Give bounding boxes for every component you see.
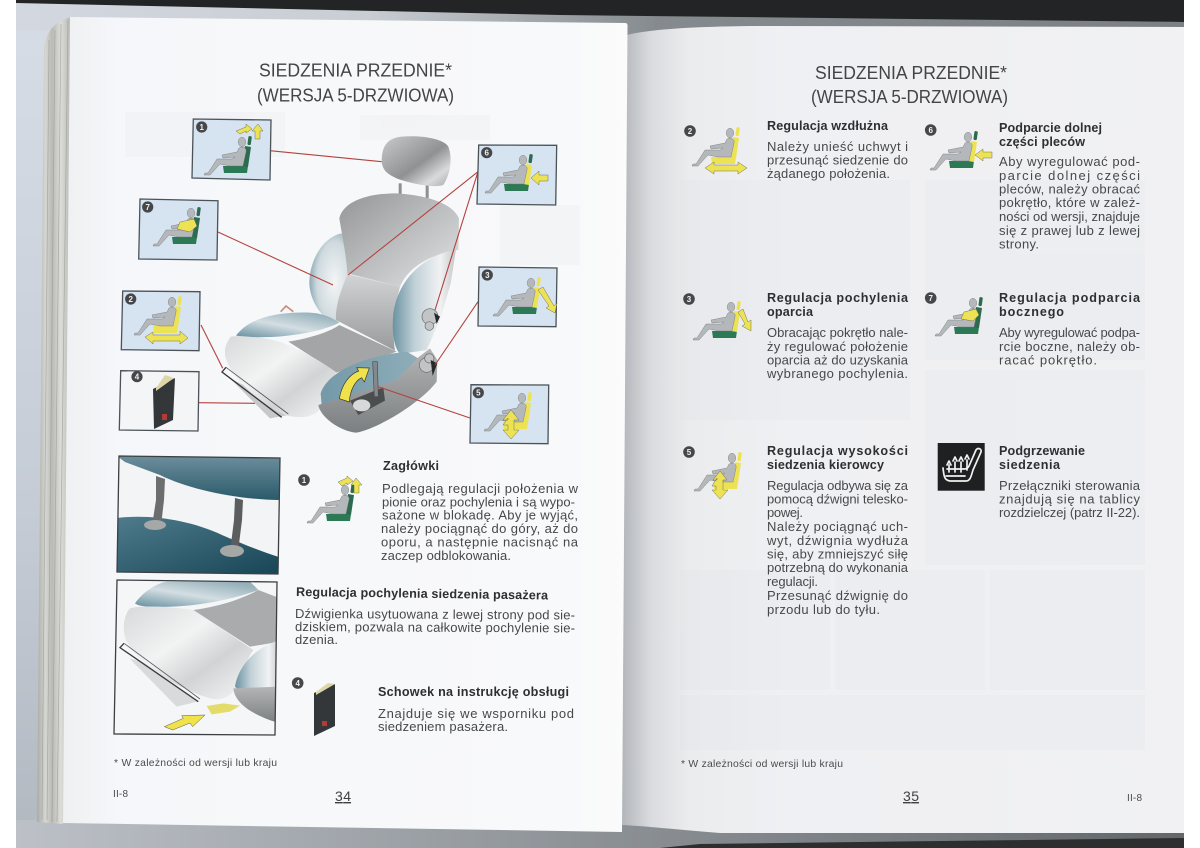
section: Podparcie dolnej części pleców: Aby wyregulować pod-	[999, 154, 1140, 169]
callout box 6: lumbar support	[477, 145, 557, 205]
title: left page	[257, 60, 454, 106]
show-through from reverse side	[680, 180, 1145, 750]
section: Zagłówki: Podlegają regulacji położenia w	[382, 481, 579, 496]
section: Regulacja pochylenia siedzenia pasażera: Regulacja pochylenia siedzenia pasażera	[296, 585, 549, 603]
section: Regulacja wysokości siedzenia kierowcy: Regulacja wysokości	[767, 444, 908, 458]
callout box 4: manual stowage: 4	[135, 373, 140, 382]
section: Regulacja podparcia bocznego: bocznego	[999, 305, 1064, 319]
section: Zagłówki: sażone w blokadę. Aby je wyjąć,	[382, 508, 578, 522]
knobs	[419, 309, 438, 372]
section: Schowek na instrukcję obsługi: Schowek na instrukcję obsługi	[378, 685, 569, 699]
section: Regulacja pochylenia oparcia: oparcia aż do uzyskania	[767, 352, 909, 368]
section: Regulacja pochylenia oparcia: oparcia	[767, 305, 814, 319]
icon: longitudinal	[684, 125, 747, 174]
callout box 7: side support	[139, 199, 218, 260]
section: Regulacja podparcia bocznego: Aby wyregulować podpa-	[999, 325, 1140, 340]
icon: height: 5	[687, 448, 692, 457]
section: Podparcie dolnej części pleców: parcie dolnej części	[999, 168, 1140, 183]
yellow arrow	[339, 368, 369, 402]
title: left page: (WERSJA 5-DRZWIOWA)	[257, 86, 454, 106]
section: Zagłówki: Zagłówki	[383, 459, 439, 473]
connector lines	[199, 151, 478, 418]
footnote: right page: * W zależności od wersji lub kraju	[681, 759, 843, 770]
section: Regulacja podparcia bocznego: racać pokrętło.	[999, 352, 1097, 368]
callout box 5: height adjustment: 5	[476, 389, 481, 398]
seat wing	[236, 313, 339, 337]
section: Regulacja pochylenia siedzenia pasażera: Dźwigienka usytuowana z lewej strony pod sie-	[295, 606, 575, 622]
section: Regulacja wzdłużna: przesunąć siedzenie do	[767, 152, 908, 168]
section: Regulacja wysokości siedzenia kierowcy: Należy pociągnąć uch-	[767, 519, 908, 534]
section: Podparcie dolnej części pleców	[925, 121, 1140, 252]
side panel	[321, 352, 418, 405]
title: right page	[811, 63, 1008, 107]
section: Podparcie dolnej części pleców: strony.	[999, 236, 1039, 252]
section: Regulacja wysokości siedzenia kierowcy	[683, 444, 909, 617]
section: Regulacja pochylenia oparcia	[683, 291, 909, 381]
section: Podgrzewanie siedzenia: Przełączniki sterowania	[999, 478, 1141, 493]
photo: passenger seat tilt lever	[114, 580, 280, 735]
page number 34: 34	[335, 788, 351, 804]
photo: headrest posts	[115, 456, 282, 576]
section: Podgrzewanie siedzenia: rozdzielczej (patrz II-22).	[999, 505, 1140, 520]
seat centre	[288, 325, 397, 373]
icon: manual: 4	[295, 679, 300, 688]
section: Regulacja wysokości siedzenia kierowcy: wyt, dźwignia wydłuża	[766, 533, 909, 548]
lever	[373, 362, 378, 397]
icon: backrest tilt: 3	[687, 295, 692, 304]
section: Podparcie dolnej części pleców: pleców, należy obracać	[999, 182, 1140, 196]
section: Zagłówki: oporu, a następnie nacisnąć na	[381, 534, 579, 550]
icon: seat heating	[938, 443, 985, 491]
section: Regulacja wzdłużna: Należy unieść uchwyt i	[767, 139, 908, 154]
backrest upper	[339, 193, 459, 287]
right bolster	[393, 249, 456, 354]
seat front	[225, 336, 337, 417]
section: Regulacja wysokości siedzenia kierowcy: przodu lub do tyłu.	[767, 602, 880, 617]
left page	[63, 17, 628, 832]
icon: side support	[925, 292, 983, 336]
section: Regulacja wzdłużna: żądanego położenia.	[767, 166, 890, 181]
section: Regulacja wysokości siedzenia kierowcy: pomocą dźwigni telesko-	[767, 492, 908, 506]
backrest lower	[336, 274, 400, 351]
footnote: left page: * W zależności od wersji lub kraju	[114, 758, 277, 769]
section: Podparcie dolnej części pleców: ności od wersji, znajduje	[999, 209, 1140, 224]
section label: left page: II-8	[113, 789, 128, 800]
icon: headrest adjustment	[298, 474, 362, 523]
callout box 1: headrest	[192, 119, 271, 180]
section: Regulacja podparcia bocznego: rcie boczne, należy ob-	[999, 339, 1140, 354]
section: Regulacja wysokości siedzenia kierowcy: regulacji.	[767, 574, 818, 589]
headrest posts	[399, 183, 429, 199]
section: Regulacja pochylenia siedzenia pasażera: dziskiem, pozwala na całkowite pochylenie sie-	[295, 619, 575, 635]
callout box 2: longitudinal adjustment	[121, 291, 200, 351]
section: Regulacja pochylenia oparcia: ży regulować położenie	[767, 339, 908, 354]
section: Podgrzewanie siedzenia	[938, 443, 1141, 520]
right page	[622, 26, 1184, 833]
seat illustration	[222, 136, 459, 433]
callout box 1: headrest: 1	[199, 123, 204, 132]
section: Regulacja wysokości siedzenia kierowcy: siedzenia kierowcy	[767, 458, 884, 472]
callout box 3: backrest tilt	[478, 267, 557, 327]
callout box 2: longitudinal adjustment: 2	[128, 295, 133, 304]
section: Podparcie dolnej części pleców: pokrętło, które w zależ-	[999, 195, 1140, 210]
section: Regulacja wzdłużna: Regulacja wzdłużna	[767, 119, 889, 133]
section: Regulacja wzdłużna	[684, 119, 908, 181]
callout box 3: backrest tilt: 3	[485, 271, 490, 280]
page edge stack	[37, 17, 80, 824]
icon: longitudinal: 2	[688, 127, 693, 136]
callout box 5: height adjustment	[470, 385, 549, 444]
section: Zagłówki: zaczep odblokowania.	[381, 548, 511, 563]
rail	[222, 367, 282, 417]
recess	[350, 387, 385, 415]
section: Regulacja pochylenia oparcia: Regulacja pochylenia	[767, 291, 909, 305]
section: Podgrzewanie siedzenia: znajdują się na tablicy	[999, 492, 1140, 506]
title: right page: SIEDZENIA PRZEDNIE*	[815, 63, 1007, 83]
section: Zagłówki: należy pociągnąć do góry, aż do	[381, 521, 578, 536]
section: Regulacja pochylenia oparcia: Obracając pokrętło nale-	[767, 325, 908, 340]
rail plate	[230, 378, 288, 418]
title: left page: SIEDZENIA PRZEDNIE*	[259, 60, 452, 80]
section: Podgrzewanie siedzenia: siedzenia	[999, 458, 1061, 472]
section: Schowek na instrukcję obsługi	[292, 677, 574, 736]
section: Regulacja pochylenia oparcia: wybranego pochylenia.	[766, 366, 908, 381]
headrest	[382, 136, 451, 186]
section: Regulacja wysokości siedzenia kierowcy: Regulacja odbywa się za	[767, 478, 909, 493]
icon: lumbar: 6	[928, 126, 933, 135]
title: right page: (WERSJA 5-DRZWIOWA)	[811, 87, 1008, 107]
icon: height	[683, 446, 742, 499]
icon: lumbar	[925, 124, 992, 170]
housing	[318, 348, 437, 433]
section: Regulacja wysokości siedzenia kierowcy: potrzebną do wykonania	[767, 560, 909, 575]
section: Zagłówki: pionie oraz pochylenia i są wypo-	[382, 494, 575, 510]
section: Regulacja pochylenia siedzenia pasażera	[295, 585, 575, 647]
section: Podparcie dolnej części pleców: Podparcie dolnej	[999, 121, 1102, 135]
section: Podparcie dolnej części pleców: się z prawej lub z lewej	[999, 223, 1140, 238]
section: Zagłówki	[298, 459, 579, 563]
rear strap	[281, 306, 293, 312]
icon: backrest tilt	[683, 293, 751, 340]
section label: right page: II-8	[1127, 793, 1142, 804]
icon: side support: 7	[928, 294, 933, 303]
section: Podgrzewanie siedzenia: Podgrzewanie	[999, 444, 1085, 458]
section: Regulacja wysokości siedzenia kierowcy: Przesunąć dźwignię do	[767, 588, 908, 603]
section: Regulacja wysokości siedzenia kierowcy: się, aby zmniejszyć siłę	[767, 546, 908, 562]
section: Schowek na instrukcję obsługi: Znajduje się we wsporniku pod	[378, 706, 574, 721]
icon: manual	[292, 677, 335, 736]
callout box 7: side support: 7	[145, 203, 150, 212]
left bolster	[309, 233, 348, 322]
section: Regulacja podparcia bocznego: Regulacja podparcia	[999, 291, 1141, 305]
section: Regulacja wysokości siedzenia kierowcy: powej.	[767, 505, 803, 520]
section: Regulacja podparcia bocznego	[925, 291, 1141, 368]
section: Schowek na instrukcję obsługi: siedzeniem pasażera.	[378, 719, 508, 734]
section: Podparcie dolnej części pleców: części pleców	[999, 135, 1085, 149]
callout box 4: manual stowage	[119, 371, 199, 431]
icon: headrest adjustment: 1	[302, 476, 307, 485]
section: Regulacja pochylenia siedzenia pasażera: dzenia.	[295, 632, 338, 647]
callout box 6: lumbar support: 6	[484, 149, 489, 158]
page number 35: 35	[903, 788, 919, 804]
